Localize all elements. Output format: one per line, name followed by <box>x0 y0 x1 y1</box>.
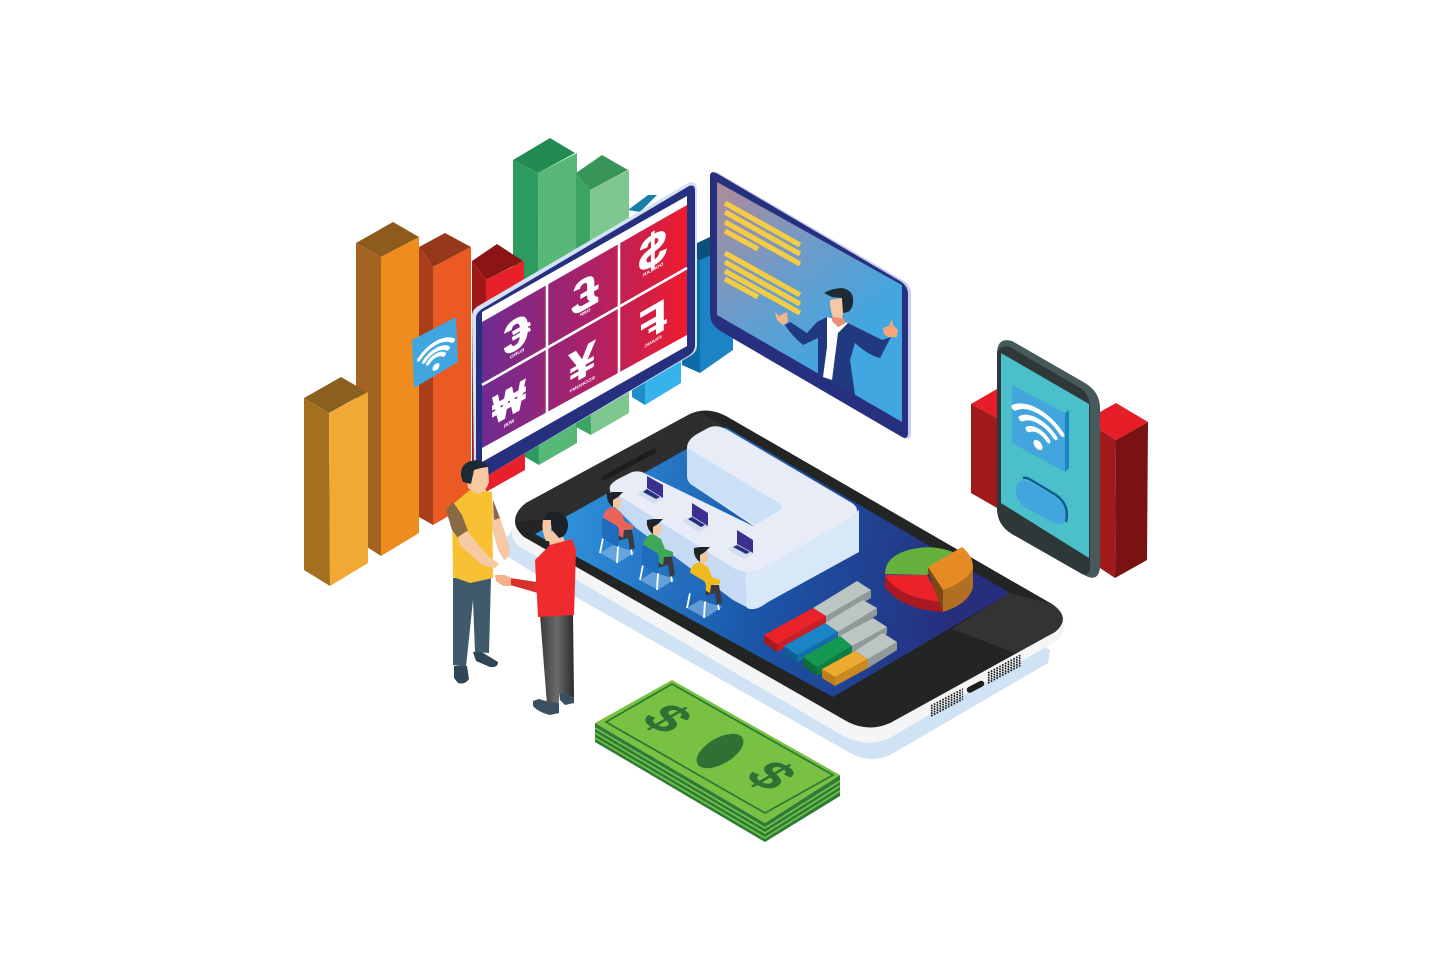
row: blue <box>784 600 877 663</box>
phone body <box>512 420 1065 743</box>
bar: cyan <box>628 195 681 405</box>
pie red slice <box>885 575 942 602</box>
shirt <box>535 539 576 617</box>
icon: wifi tag on bars <box>412 317 458 388</box>
jacket <box>785 317 891 395</box>
seated person 3 <box>687 547 722 618</box>
panel: large smartphone <box>507 410 1065 759</box>
monitor screen <box>717 182 902 422</box>
bar: orange tall <box>356 222 419 556</box>
currency tiles <box>482 205 687 448</box>
symbol: euro: EURO <box>510 347 524 361</box>
inner raised wall <box>687 448 782 525</box>
pie green slice <box>885 547 953 575</box>
bar: amber short <box>304 377 368 586</box>
trousers <box>540 613 574 707</box>
red bar left <box>971 389 997 508</box>
yellow text lines <box>725 203 800 313</box>
hand <box>495 575 511 586</box>
symbol: franc: ₣ <box>640 289 666 353</box>
phone screen <box>1001 353 1089 558</box>
symbol: franc: FRANC <box>644 335 662 350</box>
trousers <box>453 578 491 667</box>
stack of banknotes <box>595 680 840 842</box>
laptops on table <box>637 476 754 559</box>
back shoe <box>560 693 574 705</box>
far arm <box>490 500 510 560</box>
table side wall right <box>745 510 859 609</box>
panel: currency monitor <box>472 182 697 477</box>
hair <box>461 460 488 484</box>
monitor screen background <box>482 196 687 462</box>
symbol: won: WON <box>503 418 514 430</box>
front shoe <box>533 699 559 715</box>
hair <box>544 512 568 538</box>
face <box>830 298 843 318</box>
phone screen <box>535 427 1010 697</box>
hair <box>824 288 853 313</box>
monitor bezel <box>472 182 697 477</box>
face highlights <box>952 593 1063 653</box>
table side wall left <box>610 490 750 608</box>
panel: presenter monitor <box>710 172 911 439</box>
arm <box>510 578 538 593</box>
stepped bar chart <box>764 581 897 686</box>
near arm <box>458 531 499 568</box>
bar: green tall <box>513 138 577 465</box>
symbol: yen: ECONOMY <box>569 375 595 395</box>
oval button <box>1016 478 1067 524</box>
symbol: yen: ¥ <box>568 331 595 395</box>
far sleeve <box>493 500 500 520</box>
symbol: won: ₩ <box>492 372 525 435</box>
face <box>542 518 551 541</box>
speaker grill left <box>931 689 963 716</box>
phone base shadow band <box>507 500 1050 759</box>
symbol: pound: £ <box>571 262 598 326</box>
pie orange wedge <box>928 547 973 612</box>
shirt <box>823 317 848 380</box>
symbol: euro: € <box>503 302 530 366</box>
right shoe <box>473 651 498 667</box>
stack side <box>595 723 840 842</box>
person: man in red shirt <box>495 512 576 715</box>
note layers <box>595 728 840 838</box>
phone face <box>515 410 1063 728</box>
left shoe <box>454 666 469 684</box>
seated person 2 <box>640 519 675 590</box>
symbol: dollar: $ <box>639 217 667 285</box>
charging port <box>966 680 985 694</box>
wifi card <box>1012 385 1069 472</box>
right hand <box>883 319 898 337</box>
pie red side <box>885 573 943 612</box>
laptop 3 <box>727 530 754 559</box>
laptop 2 <box>682 503 709 532</box>
row: red <box>764 581 871 652</box>
neck <box>548 530 566 548</box>
seated person 1 <box>600 492 635 563</box>
pie chart <box>885 547 973 612</box>
red bar right <box>1100 403 1148 578</box>
note border <box>606 684 833 813</box>
panel: small phone with red bars <box>971 340 1148 578</box>
bar: dark orange <box>419 233 471 525</box>
phone body <box>997 340 1100 578</box>
bar: green short <box>576 155 629 435</box>
symbol: pound: GBP <box>579 307 590 319</box>
note centre oval <box>691 727 749 775</box>
laptop 1 <box>637 476 664 504</box>
top note <box>595 680 840 823</box>
tile dividers <box>482 243 687 413</box>
bar: red <box>472 244 525 492</box>
speaker grill right <box>988 655 1021 683</box>
earpiece <box>604 451 654 478</box>
left hand <box>775 312 788 325</box>
dollar sign right: $ <box>732 753 810 798</box>
bar: blue <box>682 237 733 373</box>
white conference table <box>610 426 859 609</box>
dollar sign left: $ <box>628 696 706 741</box>
row: orange <box>822 633 897 686</box>
row: green <box>803 618 887 676</box>
panel: bar chart group, back left <box>304 138 733 586</box>
monitor bezel <box>710 172 911 439</box>
vest <box>452 488 493 583</box>
near sleeve <box>446 502 468 538</box>
person: man in yellow vest <box>446 460 510 684</box>
presenter figure <box>775 288 898 395</box>
head <box>466 467 489 494</box>
table top <box>610 426 857 572</box>
symbol: dollar: DOLLAR <box>642 262 663 279</box>
neck <box>832 316 846 327</box>
